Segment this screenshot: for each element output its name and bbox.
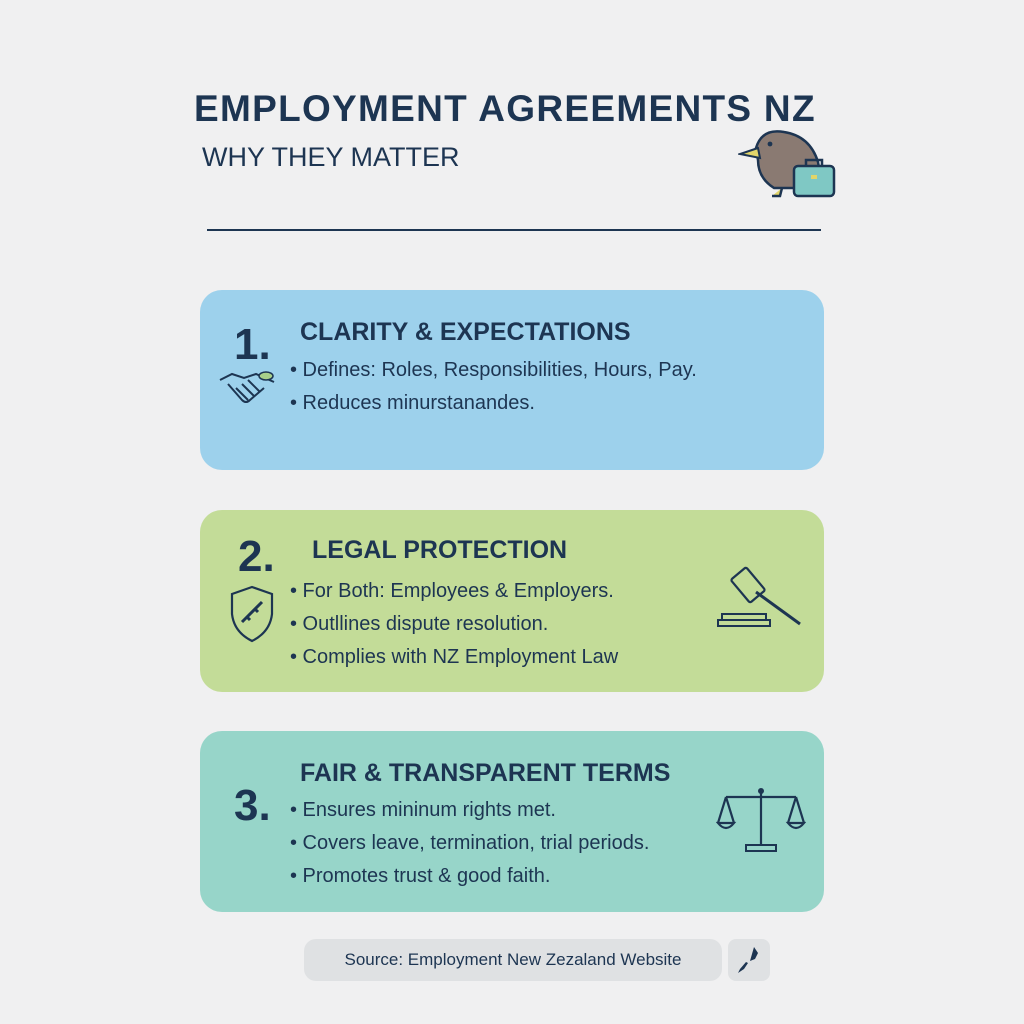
icon: gavel xyxy=(717,566,801,627)
bullets: • Promotes trust & good faith. xyxy=(290,865,550,887)
icon: handshake xyxy=(220,371,274,403)
number 1: 1. xyxy=(234,320,271,369)
bullets: • Reduces minurstanandes. xyxy=(290,392,535,414)
bullets xyxy=(290,359,697,414)
bullets xyxy=(290,799,649,887)
bullets xyxy=(290,580,618,668)
source badge xyxy=(304,939,722,981)
panel: legal protection xyxy=(200,510,824,692)
icon: shield xyxy=(230,586,274,642)
subtitle: WHY THEY MATTER xyxy=(202,142,460,172)
source badge: Source: Employment New Zezaland Website xyxy=(344,950,682,969)
bullets: • Ensures mininum rights met. xyxy=(290,799,556,821)
heading: LEGAL PROTECTION xyxy=(312,536,567,564)
title: EMPLOYMENT AGREEMENTS NZ xyxy=(194,88,816,129)
bullets: • For Both: Employees & Employers. xyxy=(290,580,614,602)
bullets: • Outllines dispute resolution. xyxy=(290,613,548,635)
heading: CLARITY & EXPECTATIONS xyxy=(300,318,631,346)
icon: kiwi with briefcase xyxy=(738,130,836,198)
divider line xyxy=(207,229,821,231)
number 3: 3. xyxy=(234,781,271,830)
panel: clarity & expectations xyxy=(200,290,824,470)
bullets: • Covers leave, termination, trial periods. xyxy=(290,832,649,854)
icon: scales xyxy=(716,788,806,852)
number 2: 2. xyxy=(238,532,275,581)
panel: fair & transparent terms xyxy=(200,731,824,912)
bullets: • Defines: Roles, Responsibilities, Hours, Pay. xyxy=(290,359,697,381)
icon: NZ map xyxy=(728,939,770,981)
heading: FAIR & TRANSPARENT TERMS xyxy=(300,759,670,787)
bullets: • Complies with NZ Employment Law xyxy=(290,646,618,668)
